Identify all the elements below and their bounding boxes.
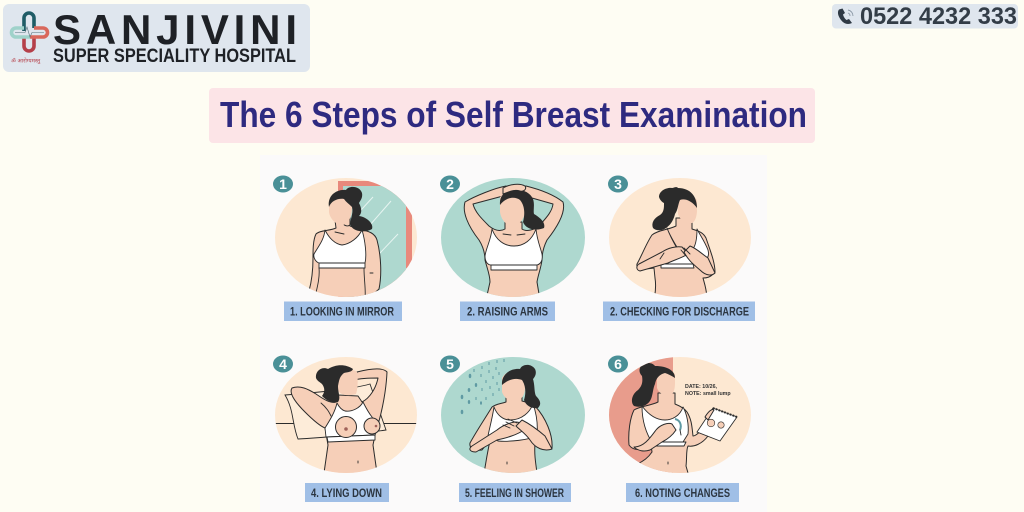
logo: Sanjivini Super Speciality Hospital bbox=[3, 4, 310, 72]
title: The 6 Steps of Self Breast Examination bbox=[220, 94, 807, 135]
logo: Sanjivini Super Speciality Hospital: SUPER SPECIALITY HOSPITAL bbox=[53, 46, 296, 67]
badge 3: 3 bbox=[614, 176, 622, 192]
label 6 bbox=[626, 483, 739, 502]
figure: woman writing notes bbox=[629, 363, 708, 480]
figure: woman facing mirror bbox=[309, 187, 381, 300]
badge 1: 1 bbox=[279, 176, 287, 192]
badge 2 bbox=[440, 176, 460, 192]
badge 4: 4 bbox=[279, 356, 287, 372]
label 5: 5. FEELING IN SHOWER bbox=[465, 488, 565, 500]
label 6: 6. NOTING CHANGES bbox=[635, 488, 730, 500]
figure: woman in shower bbox=[470, 365, 552, 480]
step 2: raising arms bbox=[441, 178, 585, 300]
label 1 bbox=[284, 302, 402, 321]
note text: DATE: 10/26, bbox=[685, 384, 718, 390]
label 5 bbox=[459, 483, 571, 502]
badge 5: 5 bbox=[446, 356, 454, 372]
badge 4 bbox=[273, 356, 293, 372]
label 2: 2. RAISING ARMS bbox=[467, 306, 548, 318]
logo: Sanjivini Super Speciality Hospital: ॐ आरोग्यमस्तु bbox=[11, 58, 41, 64]
figure: woman lying down bbox=[291, 365, 387, 480]
icon: mirror bbox=[338, 181, 412, 297]
label 4 bbox=[305, 483, 389, 502]
badge 5 bbox=[440, 356, 460, 372]
icon: phone bbox=[838, 8, 853, 24]
badge 6 bbox=[608, 356, 628, 372]
logo: Sanjivini Super Speciality Hospital: SANJIVINI bbox=[53, 6, 297, 53]
phone number: 0522 4232 333 bbox=[860, 3, 1017, 30]
badge 6: 6 bbox=[614, 356, 622, 372]
icon: notebook bbox=[697, 408, 737, 441]
note text bbox=[685, 384, 731, 397]
badge 1 bbox=[273, 176, 293, 192]
step 4: lying down bbox=[275, 357, 417, 473]
badge 3 bbox=[608, 176, 628, 192]
label 1: 1. LOOKING IN MIRROR bbox=[290, 306, 395, 318]
step 3: checking for discharge bbox=[609, 178, 751, 300]
badge 2: 2 bbox=[446, 176, 454, 192]
step 6: noting changes bbox=[609, 357, 751, 473]
label 2 bbox=[460, 302, 555, 321]
note text: NOTE: small lump bbox=[685, 391, 731, 397]
icon: medical cross bbox=[12, 13, 48, 51]
label 4: 4. LYING DOWN bbox=[311, 488, 382, 500]
step 1: looking in mirror bbox=[275, 178, 425, 303]
step 5: feeling in shower bbox=[441, 357, 585, 480]
panel: six steps bbox=[273, 176, 755, 502]
title bbox=[209, 88, 815, 143]
label 3: 2. CHECKING FOR DISCHARGE bbox=[610, 306, 749, 318]
icon: water drops bbox=[461, 359, 504, 414]
figure: woman checking for discharge bbox=[637, 187, 715, 300]
icon: pillow bbox=[285, 384, 386, 439]
label 3 bbox=[603, 302, 755, 321]
figure: woman with raised arms bbox=[464, 184, 564, 300]
